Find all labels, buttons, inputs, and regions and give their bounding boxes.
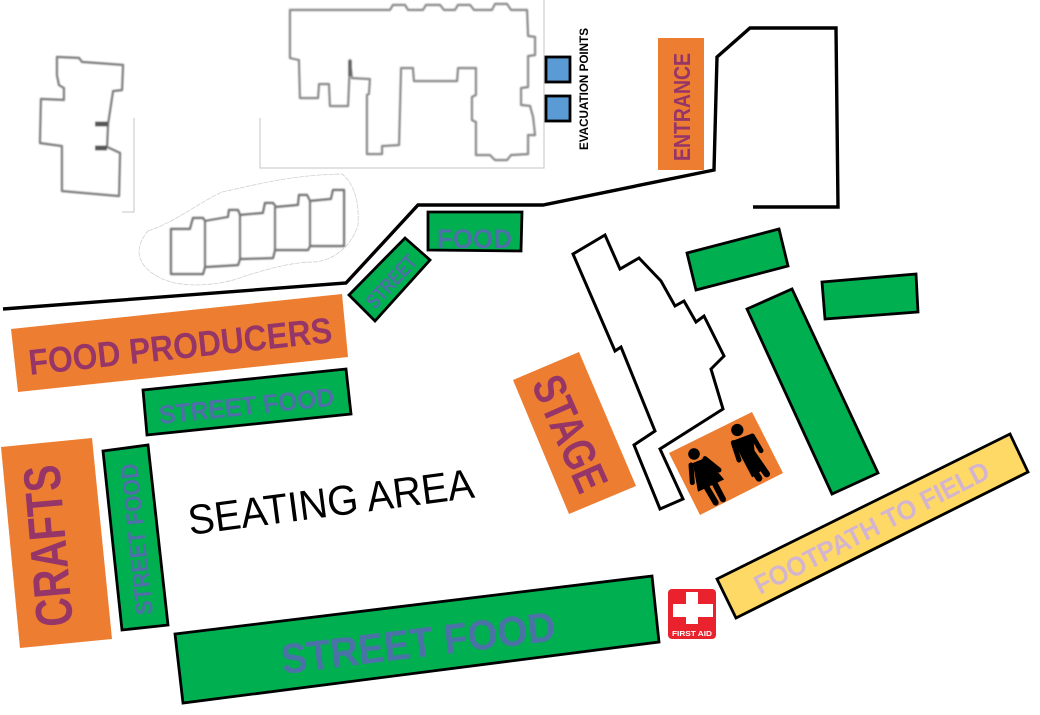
street food: main: STREET FOOD [278,603,558,683]
icon: man [731,424,767,478]
stall: food [428,212,522,254]
stall: street: STREET [362,251,422,313]
crafts [1,438,112,648]
footpath to field [717,434,1028,618]
stalls: right top [687,229,788,290]
crafts: CRAFTS [13,463,85,629]
building: main block [290,4,535,160]
street food: upper: STREET FOOD [157,382,336,430]
thin outline: main plot [260,0,544,168]
stage: STAGE [522,367,618,500]
entrance [658,38,704,170]
icon: woman [688,448,723,503]
street food: main [175,576,659,703]
evacuation points [546,28,591,150]
stalls: right long [747,289,878,494]
seating area: SEATING AREA [185,460,477,544]
icon: first aid [668,589,716,639]
footpath to field: FOOTPATH TO FIELD [749,456,994,600]
evacuation points: EVACUATION POINTS [579,28,591,150]
road boundary [3,28,838,309]
street food: vertical: STREET FOOD [116,462,159,616]
stage building [573,235,724,509]
thin outline: left plot [122,118,134,212]
stalls: right far [822,274,918,319]
building: left block [40,57,123,196]
row houses outline [139,174,358,285]
street food: vertical [103,445,168,630]
entrance: ENTRANCE [669,53,695,161]
icon: first aid: FIRST AID [672,631,712,638]
food producers: FOOD PRODUCERS [26,309,334,383]
street food: upper [143,369,351,435]
toilets [669,412,783,515]
row houses [171,190,344,274]
stall: food: FOOD [437,224,512,254]
